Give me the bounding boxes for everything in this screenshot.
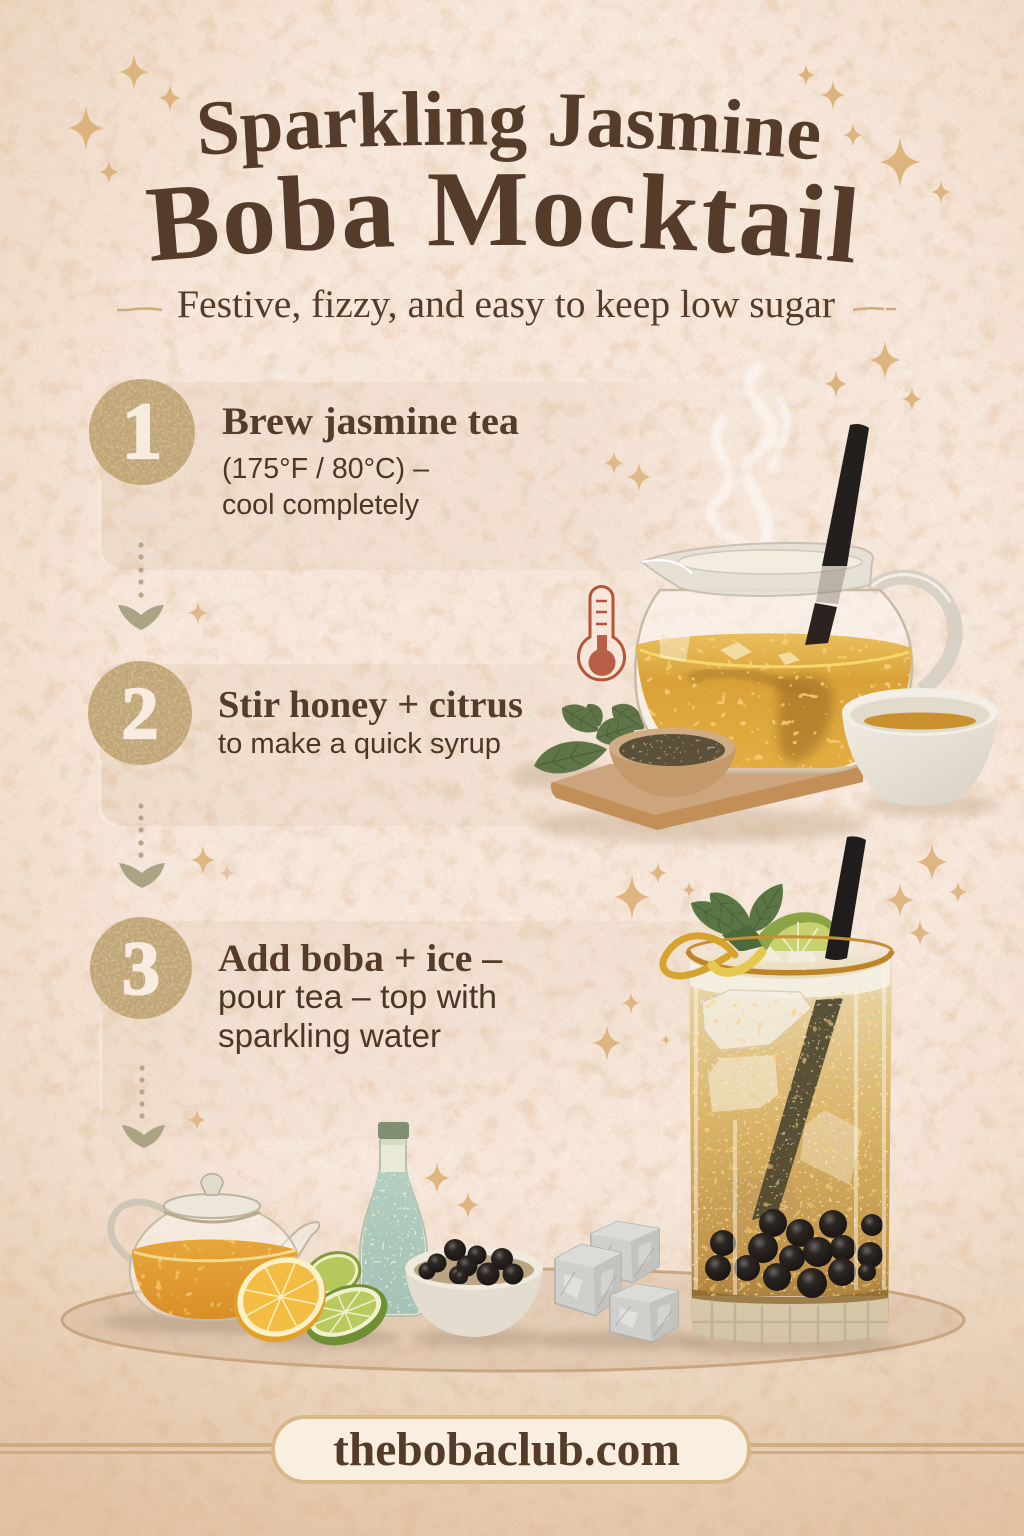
ground shadow — [510, 761, 1000, 843]
thermometer icon — [578, 586, 624, 680]
shadows — [100, 1310, 710, 1349]
lemon slice — [219, 1241, 341, 1358]
leaves — [530, 697, 651, 780]
title line 2: Boba Mocktail — [146, 172, 855, 262]
glass body and drink — [689, 951, 892, 1344]
subtitle: Festive, fizzy, and easy to keep low sugar — [177, 283, 835, 326]
footer website pill: thebobaclub.com — [333, 1424, 680, 1476]
teapot — [111, 1174, 319, 1320]
arrow: step 3 to ingredients — [122, 1065, 206, 1148]
black straw — [825, 836, 866, 960]
boba pearls — [705, 1209, 883, 1298]
illustration: ingredients — [100, 1122, 710, 1358]
footer band lines — [0, 1443, 1024, 1454]
step 1 number badge — [89, 379, 195, 485]
lime slice front — [296, 1273, 396, 1357]
arrow: step 1 to 2 — [118, 542, 208, 630]
ice in glass — [702, 990, 862, 1240]
sparkles by bottle — [424, 1162, 479, 1219]
panel: step 1 — [89, 379, 740, 570]
step 3 number badge — [90, 917, 192, 1019]
black straw in pitcher — [805, 424, 869, 645]
glass rim and spout — [642, 543, 873, 596]
gold rim — [688, 937, 892, 973]
steam — [711, 368, 788, 552]
lime slice behind — [298, 1243, 368, 1305]
lime wedge — [757, 912, 832, 960]
wooden board — [551, 764, 863, 830]
sparkling water bottle — [360, 1122, 427, 1316]
sparkles around glass — [593, 843, 967, 1061]
step 1 number badge: 1 — [122, 386, 162, 476]
step 3 body: sparkling water — [218, 1017, 441, 1054]
bowl of tea leaves — [609, 728, 736, 797]
footer website pill — [273, 1417, 749, 1482]
arrow: step 2 to 3 — [119, 803, 234, 888]
shadow — [680, 1336, 900, 1354]
step 1 body: cool completely — [222, 489, 420, 521]
step 3 number badge: 3 — [122, 927, 160, 1011]
step 1 body: (175°F / 80°C) – — [222, 453, 429, 485]
step 1 heading: Brew jasmine tea — [222, 400, 519, 443]
tray — [62, 1269, 964, 1371]
ice chunks at surface — [758, 946, 818, 962]
title sparkles — [68, 54, 951, 411]
glass handle — [870, 575, 955, 690]
glass pitcher body — [635, 590, 912, 772]
submerged straw — [752, 998, 843, 1220]
step 2 body: to make a quick syrup — [218, 728, 501, 760]
step 2 heading: Stir honey + citrus — [218, 684, 523, 726]
illustration: finished mocktail glass — [663, 836, 900, 1354]
glass highlights — [696, 970, 884, 1295]
step 2 number badge — [88, 661, 192, 765]
title line 1: Sparkling Jasmine — [200, 90, 820, 168]
title — [146, 90, 855, 262]
illustration: jasmine tea pitcher set — [510, 368, 1000, 843]
lemon twist — [663, 936, 762, 976]
panel: step 3 — [90, 917, 740, 1141]
step 2 number badge: 2 — [122, 673, 158, 755]
step 3 heading: Add boba + ice – — [218, 936, 503, 980]
gold fizz specks — [692, 990, 888, 1296]
mint garnish — [685, 877, 792, 952]
tea cup — [842, 688, 998, 806]
sparkles near pitcher — [604, 451, 651, 492]
tea liquid — [636, 633, 911, 768]
bowl of boba — [405, 1239, 543, 1337]
step 3 body: pour tea – top with — [218, 978, 497, 1015]
panel: step 2 — [88, 661, 670, 826]
ice cubes — [555, 1221, 678, 1342]
